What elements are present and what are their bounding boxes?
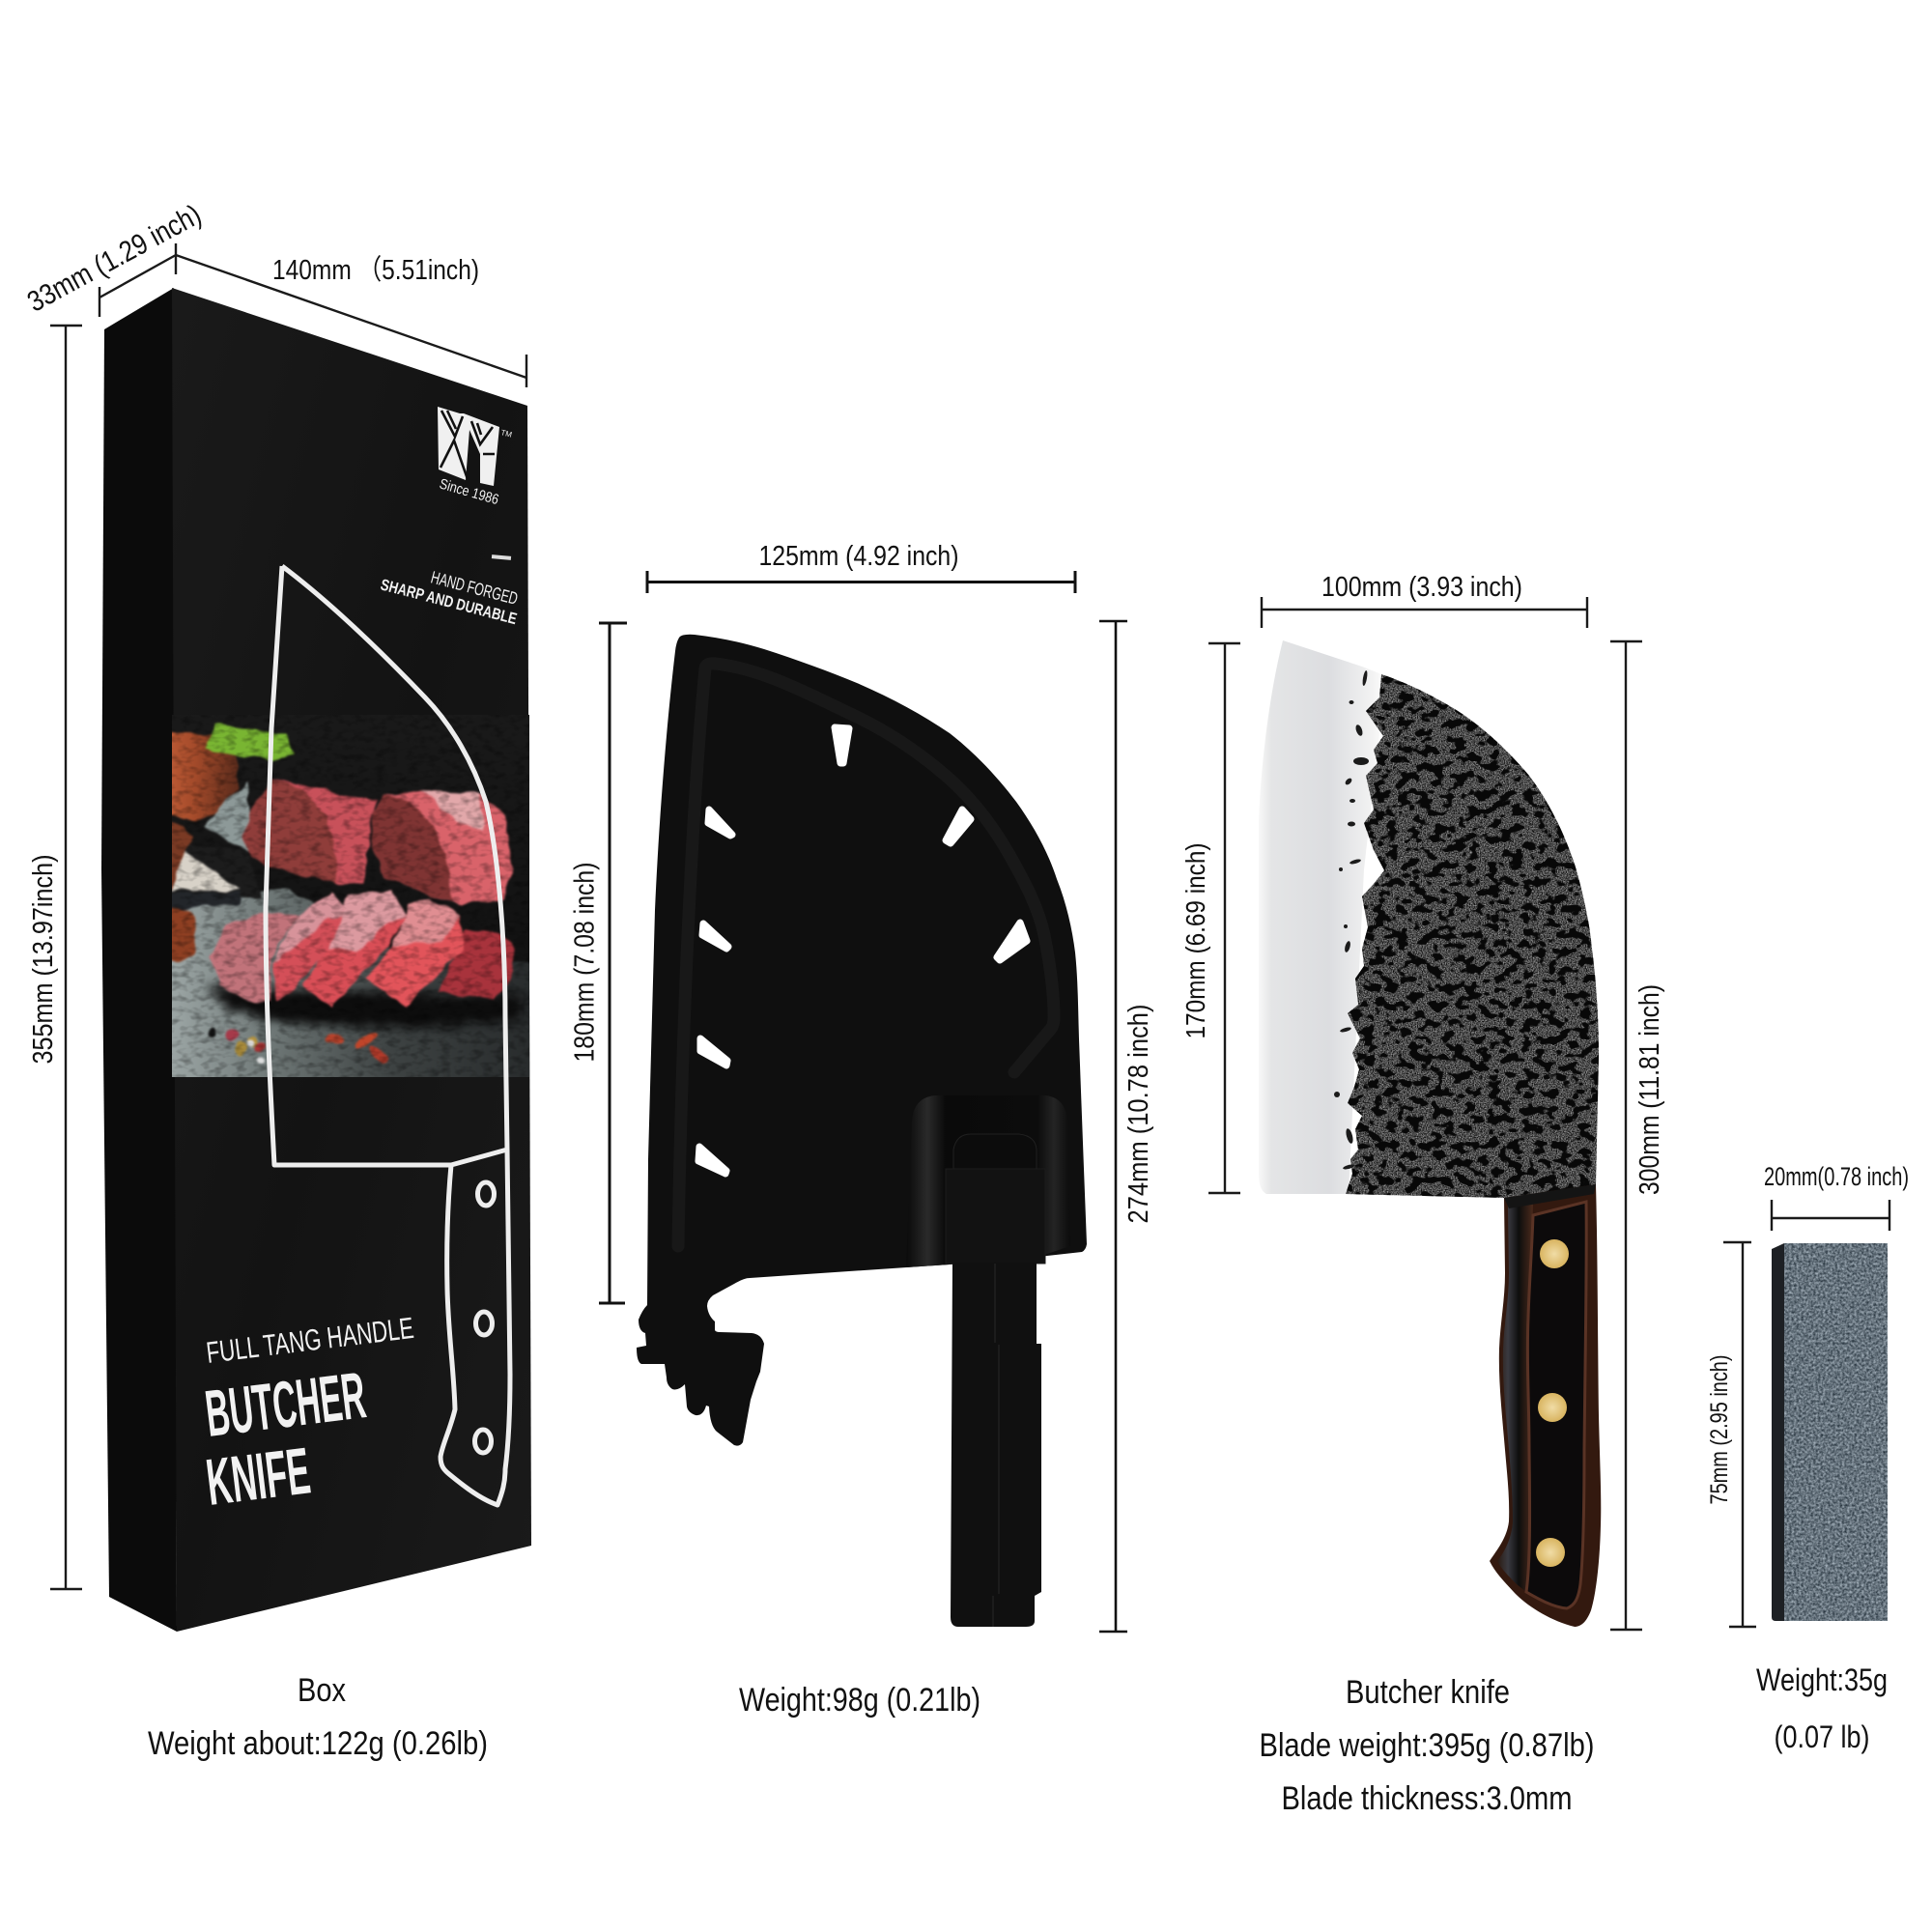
dimension: sheath blade 180mm (570, 623, 627, 1303)
photo knife (155, 893, 242, 910)
box slogan: HAND FORGED (429, 568, 520, 609)
knife handle black scale (1526, 1202, 1586, 1608)
knife polished blade (1259, 640, 1386, 1194)
box knife rivets (475, 1182, 495, 1453)
knife hammered forged surface (1346, 674, 1599, 1198)
dimension: box height 355mm: 355mm (13.97inch) (28, 854, 59, 1065)
caption: butcher knife: Blade weight:395g (0.87lb) (1260, 1727, 1594, 1764)
box product title: FULL TANG HANDLE (205, 1311, 415, 1370)
caption: box (148, 1672, 488, 1762)
brand logo: Since 1986 (438, 476, 500, 508)
roast right (370, 790, 512, 905)
caption: stone weight (1756, 1662, 1888, 1754)
box side face (101, 288, 177, 1632)
sheath body (637, 635, 1087, 1446)
sheath textured band (678, 664, 1054, 1246)
knife handle shine band (1497, 1202, 1533, 1592)
panel: sheath (637, 635, 1087, 1627)
dimension: box width 140mm (176, 255, 526, 387)
box slogan: SHARP AND DURABLE (379, 576, 519, 628)
copper bowl (172, 730, 240, 823)
sheath vent holes (698, 727, 1027, 1174)
stone dark side (1772, 1243, 1784, 1621)
dimension: sheath width 125mm: 125mm (4.92 inch) (759, 541, 958, 572)
box slogan (379, 568, 520, 628)
box product title (202, 1311, 415, 1520)
dimension: knife width 100mm (1262, 572, 1587, 628)
greens (206, 724, 295, 761)
slate surface (172, 887, 529, 1077)
box food photo (172, 715, 529, 1077)
box dash (492, 554, 511, 560)
peppercorns and chilies (208, 1027, 217, 1037)
caption: stone weight: (0.07 lb) (1774, 1719, 1870, 1754)
caption: butcher knife (1260, 1674, 1594, 1817)
dimension: blade length 170mm (1180, 643, 1240, 1193)
dimension: stone length 75mm: 75mm (2.95 inch) (1706, 1354, 1733, 1505)
caption: stone weight: Weight:35g (1756, 1662, 1888, 1697)
knife rivets (1536, 1239, 1569, 1567)
sheath clip housing (906, 1095, 1070, 1267)
sheath belt clip (951, 1263, 1041, 1627)
dimension: sheath height 274mm (1099, 621, 1154, 1632)
knife handle wood (1490, 1184, 1601, 1627)
box product title: KNIFE (203, 1434, 314, 1520)
dimension: sheath blade 180mm: 180mm (7.08 inch) (570, 862, 601, 1063)
dimension: knife length 300mm (1610, 641, 1665, 1630)
stone top face (1784, 1243, 1888, 1621)
dimension: blade length 170mm: 170mm (6.69 inch) (1180, 842, 1210, 1039)
dimension: box width 140mm: 140mm （5.51inch) (272, 255, 479, 286)
caption: box: Weight about:122g (0.26lb) (148, 1725, 488, 1762)
knife bolster edge (1504, 1184, 1596, 1208)
panel: box (101, 288, 546, 1632)
dimension: knife width 100mm: 100mm (3.93 inch) (1321, 572, 1522, 603)
panel: sharpening stone (1772, 1243, 1888, 1621)
dimension: box depth 33mm: 33mm (1.29 inch) (22, 199, 207, 319)
dimension: box height 355mm (28, 326, 82, 1589)
caption: box: Box (298, 1672, 346, 1709)
roast left (272, 779, 379, 887)
brand logo: TM (500, 428, 513, 440)
dimension: stone width 20mm (1764, 1162, 1909, 1231)
caption: butcher knife: Butcher knife (1346, 1674, 1510, 1711)
dimension: stone length 75mm (1706, 1242, 1756, 1627)
knife stray hammer marks (1334, 670, 1369, 1170)
meat slices (438, 930, 514, 1000)
box front face (172, 288, 531, 1632)
panel: butcher knife (1259, 640, 1613, 1627)
dimension: sheath height 274mm: 274mm (10.78 inch) (1123, 1005, 1154, 1223)
dimension: knife length 300mm: 300mm (11.81 inch) (1634, 984, 1665, 1195)
box knife outline (266, 566, 510, 1505)
dimension: sheath width 125mm (647, 541, 1075, 593)
box product title: BUTCHER (202, 1358, 370, 1451)
brand logo (438, 407, 513, 508)
caption: sheath weight: Weight:98g (0.21lb) (739, 1682, 980, 1719)
caption: butcher knife: Blade thickness:3.0mm (1281, 1780, 1573, 1817)
